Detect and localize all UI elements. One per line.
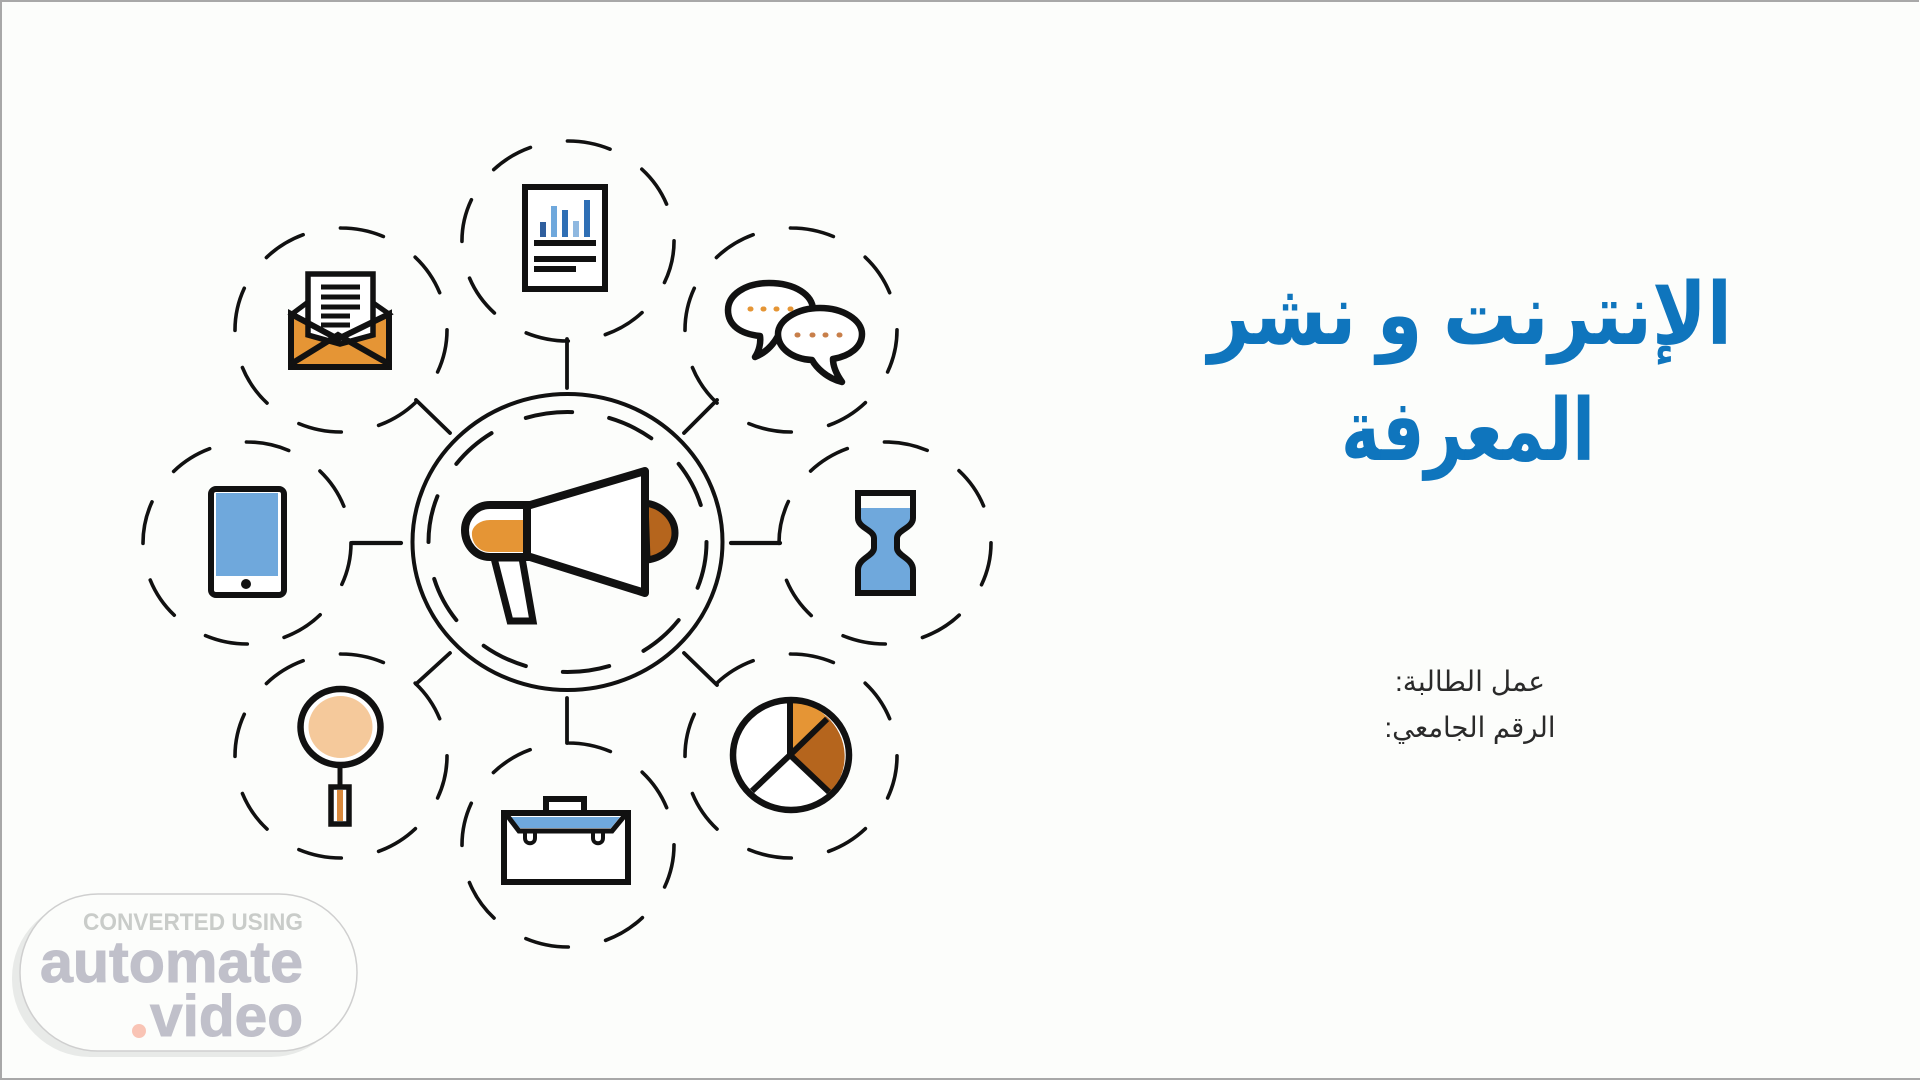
satellite: pie chart — [684, 653, 897, 858]
watermark badge: video — [150, 984, 303, 1049]
watermark badge — [12, 894, 357, 1057]
satellite: report document — [462, 141, 674, 388]
connector: magnifier to hub — [416, 653, 450, 684]
center hub circle — [412, 394, 722, 690]
satellite: hourglass — [731, 442, 991, 644]
title — [1205, 267, 1732, 481]
connector: briefcase to hub — [565, 698, 569, 743]
connector: pie to hub — [684, 653, 717, 685]
student info text — [1384, 666, 1556, 744]
satellite: briefcase — [462, 698, 674, 947]
satellite: envelope — [235, 228, 450, 433]
diagram: megaphone hub and satellites — [143, 141, 991, 947]
watermark badge: automate — [40, 930, 303, 995]
connector: hourglass to hub — [731, 541, 780, 545]
student info text: الرقم الجامعي: — [1384, 712, 1556, 744]
icon: megaphone — [465, 471, 675, 621]
connector: envelope to hub — [416, 400, 450, 433]
title: الإنترنت و نشر — [1205, 267, 1732, 366]
satellite: tablet — [143, 442, 401, 644]
watermark badge: CONVERTED USING — [83, 909, 303, 936]
title: المعرفة — [1341, 383, 1595, 481]
connector: chat to hub — [684, 400, 717, 433]
satellite: chat bubbles — [684, 228, 897, 433]
connector: tablet to hub — [352, 541, 401, 545]
satellite: magnifier — [235, 653, 450, 858]
connector: top — [565, 339, 569, 388]
student info text: عمل الطالبة: — [1395, 666, 1545, 697]
